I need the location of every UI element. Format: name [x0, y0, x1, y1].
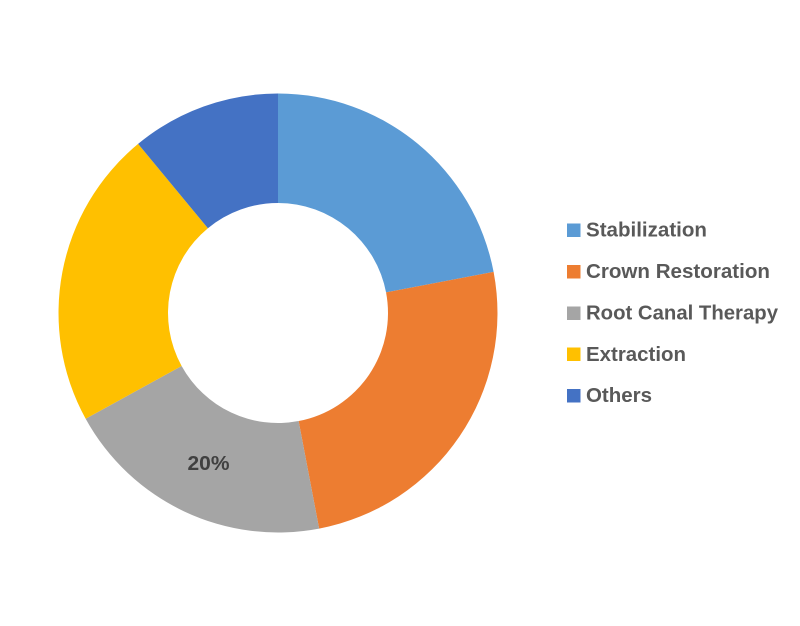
legend item: Root Canal Therapy: Root Canal Therapy: [586, 302, 779, 324]
legend: [567, 220, 779, 407]
donut chart: [59, 94, 497, 532]
data label: 20%: 20%: [188, 453, 230, 475]
segment: Root Canal Therapy: [86, 366, 319, 532]
segment: Stabilization: [278, 94, 494, 292]
segment: Crown Restoration: [299, 272, 497, 529]
segment: Others: [138, 94, 278, 228]
legend item: Crown Restoration: Crown Restoration: [586, 261, 770, 283]
legend item: Stabilization: Stabilization: [586, 220, 707, 242]
segment: Extraction: [59, 144, 208, 419]
legend item: Extraction: Extraction: [586, 344, 686, 366]
legend item: Others: Others: [586, 385, 652, 407]
